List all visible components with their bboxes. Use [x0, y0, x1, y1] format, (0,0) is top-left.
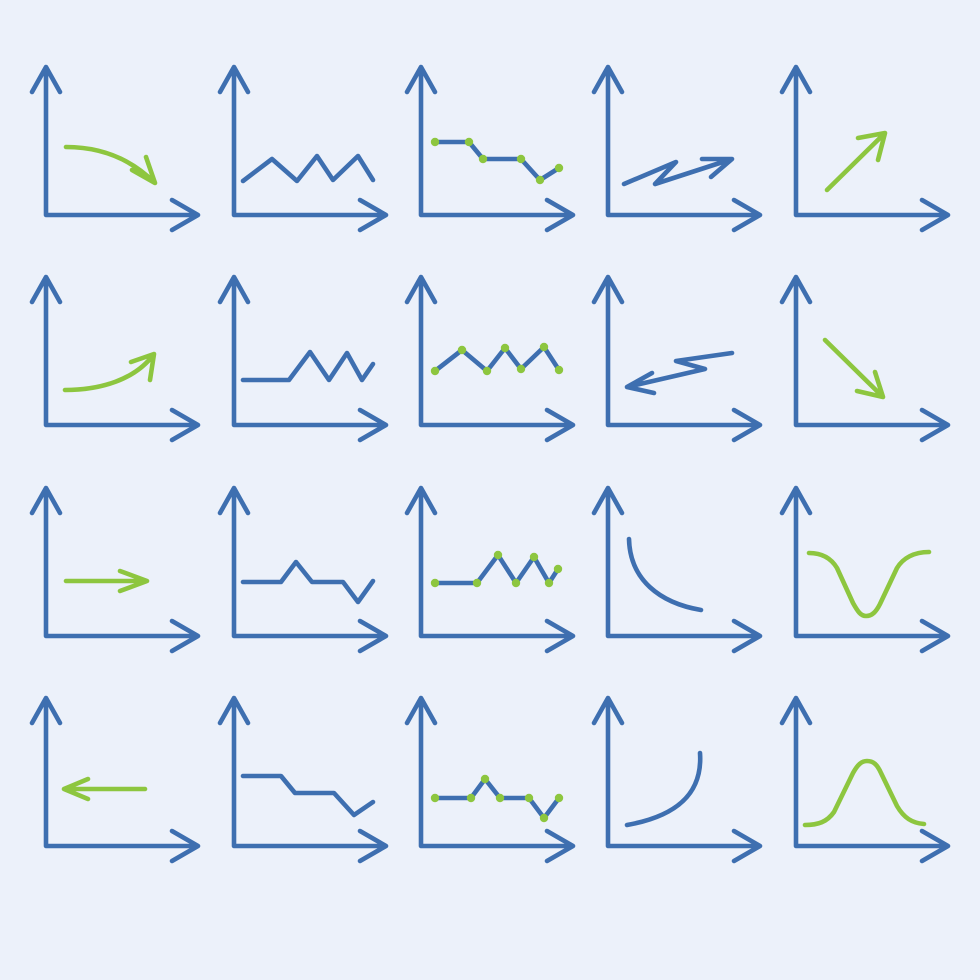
- panel: zigzag arrow down: [594, 277, 760, 440]
- icon: green arrow down right: [825, 340, 883, 397]
- panel: zigzag line with points: [407, 277, 573, 440]
- panel: stepped declining line: [220, 698, 386, 861]
- line chart: concave falling curve: [629, 539, 701, 610]
- axes: [782, 67, 948, 230]
- axes: [32, 488, 198, 651]
- axes: [407, 67, 573, 230]
- panel: zigzag line: [220, 67, 386, 230]
- panel: declining line with points: [407, 67, 573, 230]
- icon: blue lightning arrow up: [624, 159, 732, 184]
- panel: curved arrow rising: [32, 277, 198, 440]
- line chart: [243, 156, 373, 181]
- panel: rising zigzag with points: [407, 488, 573, 651]
- icon: green arrow left: [64, 779, 145, 799]
- panel: inverted bell curve: [782, 488, 948, 651]
- line chart: [243, 352, 373, 380]
- panel: arrow left: [32, 698, 198, 861]
- axes: [594, 67, 760, 230]
- axes: [782, 488, 948, 651]
- line chart with green points: [431, 551, 562, 587]
- line chart: green valley curve: [809, 552, 929, 616]
- line chart with green points: [431, 138, 563, 184]
- panel: flat then zigzag line: [220, 277, 386, 440]
- axes: [782, 277, 948, 440]
- axes: [220, 277, 386, 440]
- line chart with green points: [431, 775, 563, 822]
- axes: [407, 488, 573, 651]
- line chart: [243, 562, 373, 602]
- axes: [594, 488, 760, 651]
- axes: [594, 277, 760, 440]
- line chart: green bell curve: [805, 761, 924, 825]
- icon: green arrow right: [66, 571, 147, 591]
- line chart: [243, 776, 373, 815]
- panel: zigzag arrow up: [594, 67, 760, 230]
- line chart with green points: [431, 343, 563, 375]
- axes: [407, 698, 573, 861]
- panel: flat line with points: [407, 698, 573, 861]
- panel: exponential curve: [594, 698, 760, 861]
- axes: [220, 698, 386, 861]
- icon: green curved down arrow: [66, 147, 155, 183]
- axes: [32, 698, 198, 861]
- panel: arrow right: [32, 488, 198, 651]
- axes: [220, 67, 386, 230]
- panel: straight arrow down: [782, 277, 948, 440]
- icon: green arrow up right: [827, 133, 885, 190]
- axes: [407, 277, 573, 440]
- icon: green curved up arrow: [65, 354, 154, 390]
- axes: [32, 67, 198, 230]
- line chart: rising curve: [627, 753, 700, 825]
- panel: flat line with bump and dip: [220, 488, 386, 651]
- axes: [782, 698, 948, 861]
- panel: curved arrow declining: [32, 67, 198, 230]
- axes: [594, 698, 760, 861]
- axes: [220, 488, 386, 651]
- axes: [32, 277, 198, 440]
- icon: blue lightning arrow down: [627, 353, 732, 393]
- panel: straight arrow up: [782, 67, 948, 230]
- panel: decay curve: [594, 488, 760, 651]
- panel: bell curve: [782, 698, 948, 861]
